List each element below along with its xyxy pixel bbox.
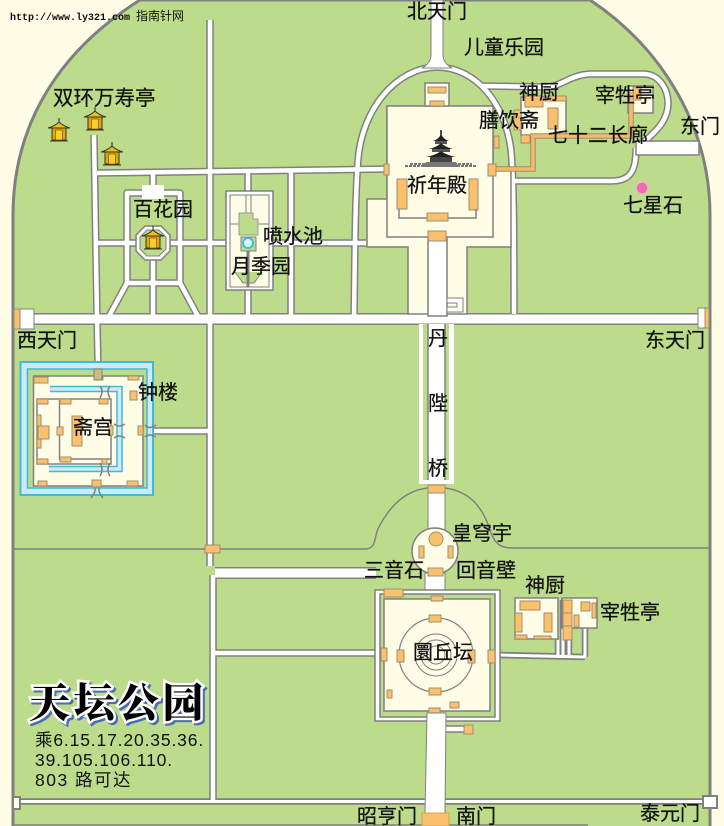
label: north heavenly gate: 北天门: [407, 0, 467, 23]
panel: hall of prayer outer terrace: [367, 83, 511, 316]
icon: hall of prayer for good harvests: [405, 130, 476, 167]
label: danbi bridge: 陛: [428, 392, 448, 415]
label: hundred flower garden: 百花园: [133, 198, 193, 221]
east heavenly gate: [698, 308, 709, 328]
panel: imperial vault: [412, 528, 458, 597]
label: banquet hall: 膳饮斋: [479, 109, 539, 132]
panel: circular mound altar: [375, 589, 500, 721]
bus routes text: 乘6.15.17.20.35.36.: [35, 730, 204, 750]
label: long corridor: 七十二长廊: [548, 124, 648, 147]
label: rose garden: 月季园: [231, 255, 291, 278]
label: taiyuan gate: 泰元门: [640, 802, 700, 825]
label: hall of prayer: 祈年殿: [407, 174, 467, 197]
bus routes text: 803 路可达: [35, 770, 132, 790]
panel: danbi bridge: [419, 324, 454, 531]
label: danbi bridge: [428, 328, 448, 480]
east gate road: [636, 141, 699, 155]
panel: palace of abstinence: [20, 362, 156, 498]
southeast corner gate: [703, 796, 717, 808]
label: danbi bridge: 丹: [428, 328, 448, 350]
label: butchering pavilion: 宰牲亭: [595, 84, 655, 107]
label: danbi bridge: 桥: [428, 457, 448, 480]
bus routes text: [35, 730, 204, 790]
long corridor: [488, 92, 631, 169]
label: palace of abstinence: 斋宫: [73, 416, 113, 439]
label: fountain: 喷水池: [263, 225, 323, 248]
label: seven star stone: 七星石: [623, 194, 683, 217]
south boundary line: [13, 824, 588, 826]
panel: butchering pavilion north: [628, 86, 653, 113]
bus routes text: 39.105.106.110.: [35, 750, 173, 770]
west heavenly gate: [14, 309, 34, 329]
icon: seven star stone: [636, 182, 648, 194]
label: children's park: 儿童乐园: [464, 36, 544, 59]
panel: butchering pavilion south: [562, 598, 597, 640]
circular mound wall line: [13, 488, 710, 549]
label: circular mound altar: 圜丘坛: [413, 641, 473, 664]
label: echo wall: 回音壁: [456, 559, 516, 582]
label: east heavenly gate: 东天门: [645, 329, 705, 352]
panel: hundred flower garden: [136, 185, 170, 260]
source url: http://www.ly321.com 指南针网: [10, 7, 184, 24]
icon: hundred flower garden pavilion: [142, 226, 164, 249]
label: double ring pavilion: 双环万寿亭: [53, 87, 156, 110]
east hall gate: [488, 164, 496, 176]
label: triple sound stone: 三音石: [364, 559, 424, 582]
divider road to palace: [205, 545, 220, 553]
label: bell tower: 钟楼: [138, 381, 178, 404]
label: divine kitchen: 神厨: [519, 81, 559, 104]
southwest corner gate: [13, 797, 20, 809]
label: butchering pavilion south: 宰牲亭: [600, 601, 660, 624]
icon: pavilion west: [48, 118, 70, 141]
label: east gate: 东门: [680, 115, 720, 138]
panel: divine kitchen north: [514, 96, 566, 143]
south avenue: [422, 713, 473, 826]
panel: rose garden: [226, 191, 273, 290]
title: 天坛公园: [29, 670, 207, 729]
icon: pavilion east: [101, 142, 123, 165]
label: divine kitchen south: 神厨: [525, 574, 565, 597]
panel: divine kitchen south: [515, 598, 558, 639]
icon: pavilion centre: [84, 107, 106, 130]
label: west heavenly gate: 西天门: [17, 329, 77, 352]
north gate road: [422, 0, 452, 68]
label: imperial vault: 皇穹宇: [452, 522, 512, 545]
